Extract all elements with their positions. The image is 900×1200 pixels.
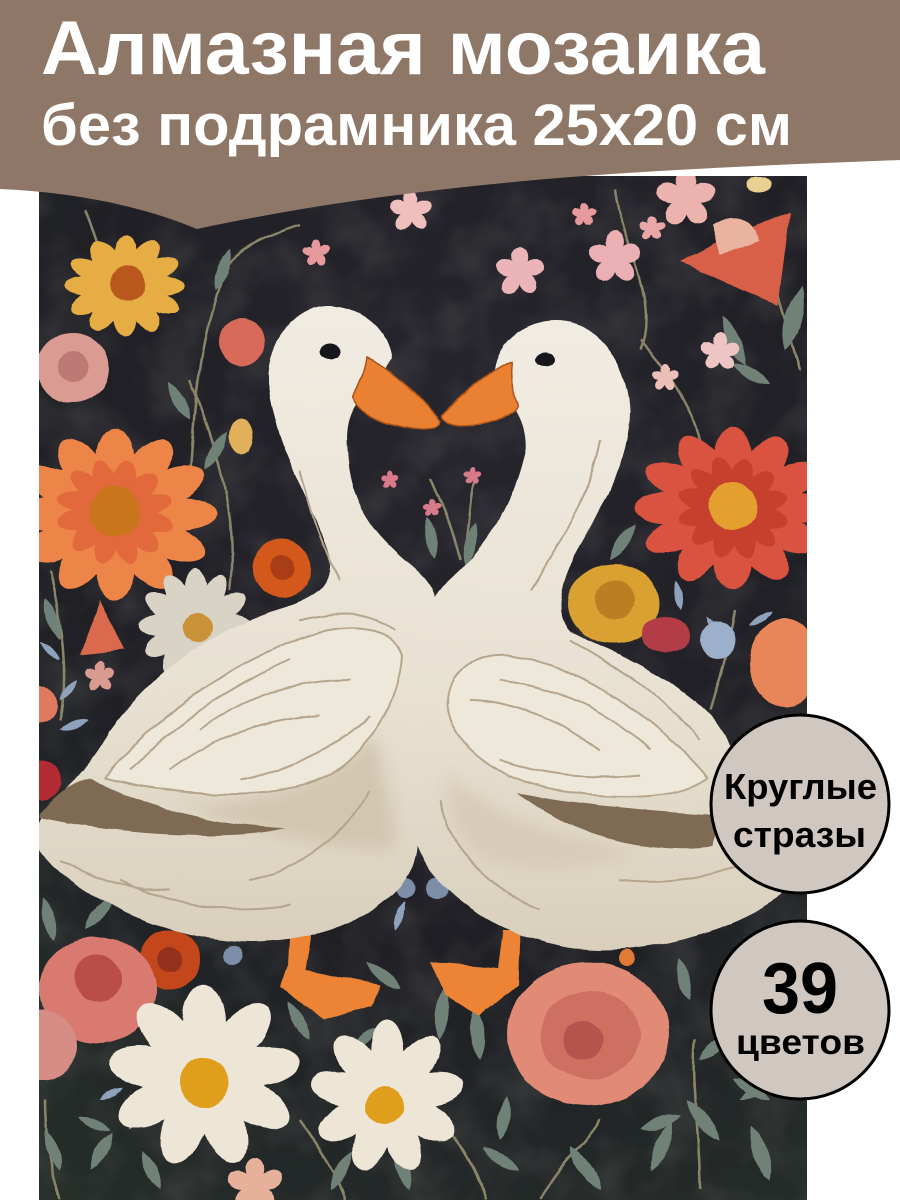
left goose (39, 306, 440, 942)
eye (320, 343, 340, 359)
body shading (196, 738, 397, 851)
foliage and stems (37, 190, 811, 1200)
title: Алмазная мозаика (41, 6, 766, 91)
wing (105, 628, 402, 794)
badge: 39 colours: 39 (762, 949, 838, 1029)
badge: 39 colours (711, 921, 889, 1099)
flower: white daisy behind goose (138, 568, 250, 672)
flower: big orange left (39, 428, 218, 601)
header banner (0, 0, 900, 229)
painted content (7, 168, 832, 1200)
eye (535, 353, 555, 367)
brown wing feathers (518, 793, 718, 849)
flower: yellow top left (64, 235, 186, 337)
brown wing feathers (39, 778, 285, 835)
badge: round rhinestones (711, 715, 889, 893)
flower: large white daisy (105, 984, 303, 1169)
body shading (447, 781, 616, 866)
right goose (398, 321, 782, 950)
wing (447, 655, 708, 796)
badge: 39 colours: цветов (736, 1023, 865, 1062)
badge: round rhinestones: Круглые (724, 766, 877, 807)
subtitle: без подрамника 25х20 см (41, 93, 792, 158)
roses and small flowers (7, 168, 820, 1200)
goose feet (280, 930, 635, 1020)
flower: big red right (634, 426, 807, 590)
flower: small white daisy (308, 1019, 466, 1176)
beak (441, 361, 518, 425)
badge: round rhinestones: стразы (733, 814, 866, 855)
beak (353, 358, 440, 429)
painting: two geese among flowers (7, 168, 832, 1200)
